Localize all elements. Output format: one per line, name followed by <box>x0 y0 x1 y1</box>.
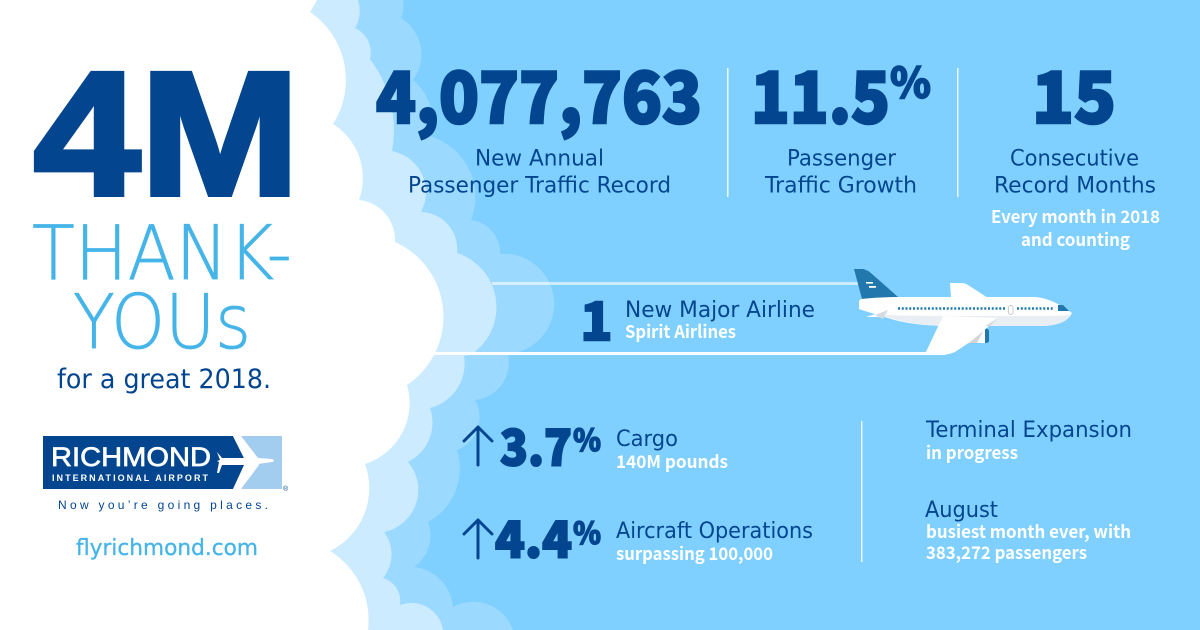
headline: THANK-YOUs: YOUs <box>73 278 251 366</box>
note: terminal expansion: in progress <box>926 440 1018 465</box>
stat: consecutive record months: Record Months <box>994 174 1156 198</box>
cloud layer: mid blue <box>0 0 554 630</box>
headline: THANK-YOUs <box>32 209 292 366</box>
stat: new major airline: Spirit Airlines <box>625 319 736 344</box>
stat: cargo: 140M pounds <box>616 449 728 474</box>
logo: Richmond International Airport <box>43 436 289 512</box>
note: August record: busiest month ever, with <box>926 519 1131 544</box>
plane windows <box>898 307 1053 310</box>
stat: cargo: % <box>573 416 601 460</box>
cloud layer: pale blue <box>0 0 496 630</box>
stat: new major airline: 1 <box>580 278 613 356</box>
contrail: lower <box>433 352 945 355</box>
logo wordmark: RICHMOND <box>51 442 211 472</box>
stat: consecutive record months: 15 <box>1032 42 1116 144</box>
plane fuselage <box>859 297 1072 326</box>
icon: logo plane <box>217 436 274 489</box>
stat: new major airline <box>580 278 815 356</box>
stat: aircraft operations: % <box>573 509 601 553</box>
stat: cargo: Cargo <box>616 427 678 452</box>
plane tailplane <box>866 310 888 317</box>
note: August record: 383,272 passengers <box>926 540 1087 565</box>
stat: traffic growth <box>751 42 931 198</box>
headline: 4M: 4M <box>34 36 300 232</box>
note: August record <box>925 498 1131 565</box>
stat: aircraft operations: 4.4 <box>495 500 572 572</box>
logo: light blue panel <box>241 436 282 489</box>
plane tail fin <box>854 269 898 299</box>
note: terminal expansion <box>925 418 1132 465</box>
illustration: airplane <box>854 269 1072 355</box>
cloud layer: white <box>0 0 443 630</box>
contrail: upper <box>492 282 860 285</box>
stat: consecutive record months: Every month in 2018 <box>991 204 1160 229</box>
stat: traffic growth: Passenger <box>787 146 897 172</box>
stat: annual passenger record: New Annual <box>475 146 604 172</box>
icon: up arrow <box>464 520 492 558</box>
stat: aircraft operations: Aircraft Operations <box>616 519 813 544</box>
logo tagline: Now you’re going places. <box>58 498 268 512</box>
logo: navy panel <box>43 436 246 489</box>
plane belly shading <box>882 315 1071 326</box>
subheading: for a great 2018: for a great 2018. <box>57 364 271 395</box>
headline: THANK-YOUs: THANK- <box>32 209 292 297</box>
icon: up arrow <box>464 427 492 465</box>
website link: flyrichmond.com <box>76 536 258 561</box>
stat: cargo: 3.7 <box>500 408 572 480</box>
stat: annual passenger record <box>376 42 702 198</box>
stat: traffic growth: 11.5 <box>751 42 890 144</box>
note: August record: August <box>925 498 998 523</box>
note: terminal expansion: Terminal Expansion <box>925 418 1132 443</box>
logo subtitle: INTERNATIONAL AIRPORT <box>52 473 208 483</box>
plane engine <box>985 328 989 343</box>
logo registered mark: ® <box>283 485 289 493</box>
stat: consecutive record months: and counting <box>1021 227 1131 252</box>
plane upper wing <box>950 283 988 298</box>
stat: aircraft operations: surpassing 100,000 <box>616 541 773 566</box>
stat: new major airline: New Major Airline <box>625 298 815 323</box>
plane main wing <box>925 316 998 355</box>
stat: annual passenger record: Passenger Traffic Record <box>408 174 671 198</box>
stat: traffic growth: % <box>890 50 931 111</box>
stat: cargo <box>464 408 728 480</box>
stat: consecutive record months <box>991 42 1160 252</box>
stat: aircraft operations <box>464 500 813 572</box>
plane cockpit <box>1058 305 1069 311</box>
stat: consecutive record months: Consecutive <box>1010 146 1139 172</box>
stat: traffic growth: Traffic Growth <box>764 174 917 198</box>
stat: annual passenger record: 4,077,763 <box>376 42 702 144</box>
plane door <box>1008 306 1013 314</box>
